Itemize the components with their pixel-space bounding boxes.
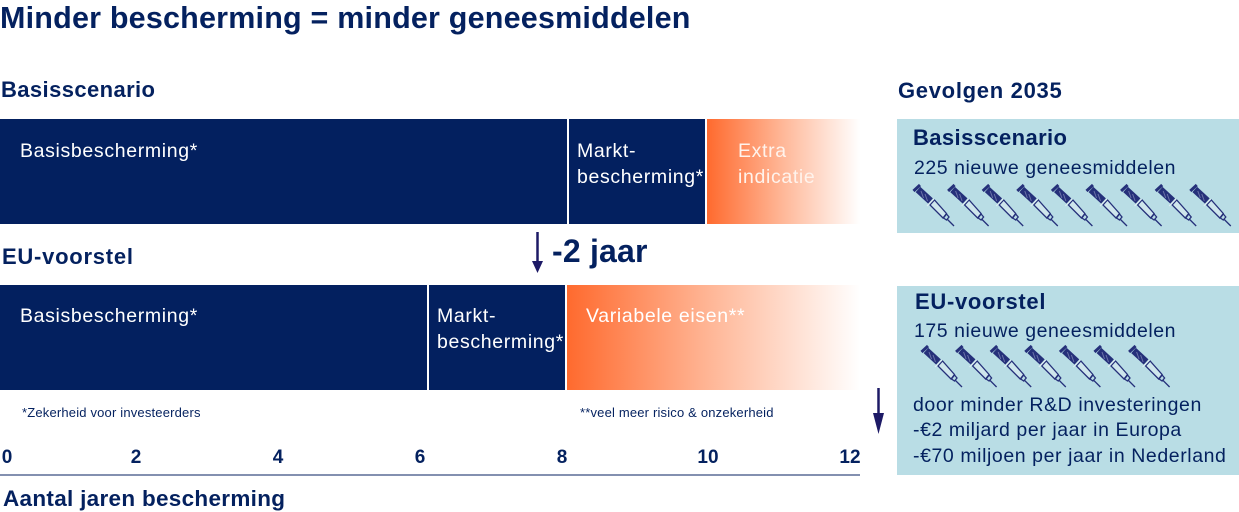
footnote: risico: **veel meer risico & onzekerheid [580,405,774,420]
axis labels: 8 [557,447,567,468]
segment: basisbescherming [0,285,427,390]
axis labels: 0 [2,447,12,468]
axis labels: 10 [697,447,719,468]
bar: eu-voorstel [0,285,848,390]
panel: basisscenario [897,119,1239,233]
footnote: investeerders: *Zekerheid voor investeerders [22,405,201,420]
panel heading: EU-voorstel [915,289,1046,314]
axis labels: 2 [131,447,141,468]
bar: basisscenario [0,119,854,224]
panel details: door minder R&D investeringen [913,394,1202,416]
segment: basisbescherming: Basisbescherming* [20,305,198,327]
segment: extra indicatie [707,119,860,224]
panel details: -€70 miljoen per jaar in Nederland [913,445,1226,467]
segment: variabele eisen: Variabele eisen** [586,305,745,327]
heading: gevolgen: Gevolgen 2035 [898,78,1062,103]
icons: 9 syringes [912,184,1232,226]
segment: marktbescherming [429,285,565,390]
panel details: -€2 miljard per jaar in Europa [913,419,1182,441]
heading: eu-voorstel: EU-voorstel [2,244,134,269]
segment: basisbescherming: Basisbescherming* [20,140,198,162]
axis labels: 12 [839,447,861,468]
panel text: 175 nieuwe geneesmiddelen [914,320,1176,342]
arrow: down [532,232,543,273]
callout: -2 jaar: -2 jaar [552,233,648,269]
axis labels [2,447,861,468]
panel heading: Basisscenario [913,125,1067,150]
panel text: 225 nieuwe geneesmiddelen [914,157,1176,179]
axis labels: 6 [415,447,425,468]
segment: extra indicatie: indicatie [738,166,815,188]
icons: 7 syringes [920,344,1170,388]
panel: eu-voorstel [897,286,1239,475]
segment: marktbescherming: bescherming* [437,330,564,352]
segment: marktbescherming: bescherming* [577,166,704,188]
segment: basisbescherming [0,119,567,224]
segment: marktbescherming: Markt- [577,140,636,162]
segment: variabele eisen [567,285,860,390]
title: Minder bescherming = minder geneesmiddelen [0,1,691,35]
segment: extra indicatie: Extra [738,140,787,162]
segment: marktbescherming: Markt- [437,305,496,327]
heading: basisscenario: Basisscenario [1,77,155,102]
axis line [0,474,860,476]
panel details [913,394,1226,467]
arrow: down right [873,388,884,434]
axis title: Aantal jaren bescherming [3,486,285,511]
segment: marktbescherming [569,119,705,224]
axis labels: 4 [273,447,283,468]
